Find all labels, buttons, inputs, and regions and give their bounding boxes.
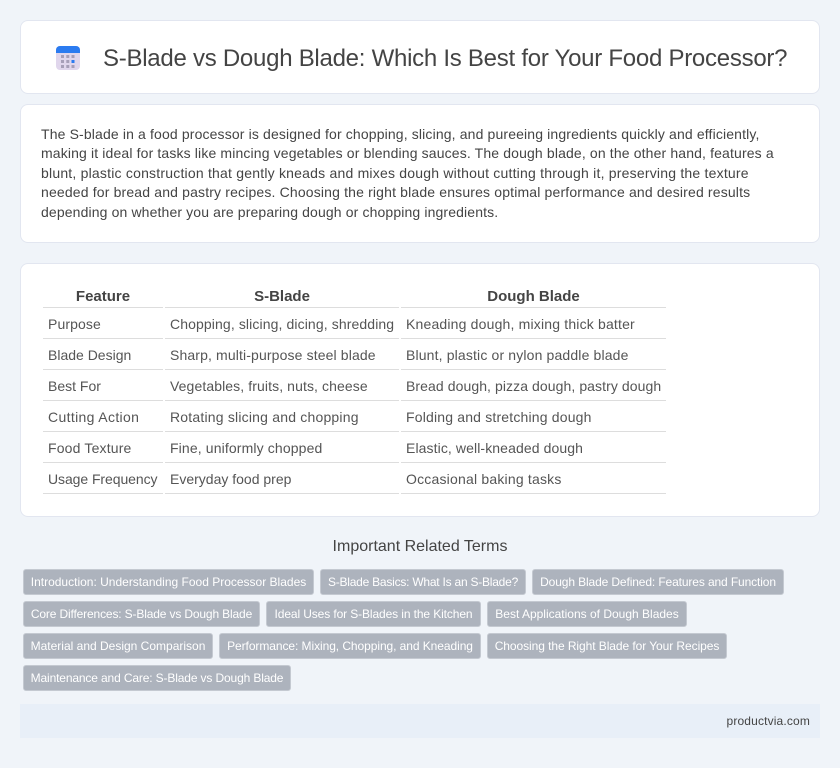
related terms tags: Best Applications of Dough Blades — [495, 607, 679, 621]
comparison table: Feature — [76, 288, 130, 305]
intro text: The S-blade in a food processor is designed for chopping, slicing, and pureeing ingredients quickly and efficiently, — [41, 126, 759, 142]
footer bar — [20, 704, 820, 738]
comparison table: Dough Blade — [487, 288, 580, 305]
comparison table: Everyday food prep — [170, 471, 291, 487]
intro text — [41, 126, 774, 220]
intro text: needed for bread and pastry recipes. Choosing the right blade ensures optimal performance and desired results — [41, 184, 750, 200]
comparison table: Occasional baking tasks — [406, 471, 562, 487]
footer source: productvia.com — [727, 714, 810, 728]
related terms tags: Maintenance and Care: S-Blade vs Dough Blade — [31, 671, 283, 685]
related terms tags: Choosing the Right Blade for Your Recipes — [495, 639, 719, 653]
comparison table: Bread dough, pizza dough, pastry dough — [406, 378, 661, 394]
table card — [20, 263, 820, 517]
comparison table: Fine, uniformly chopped — [170, 440, 322, 456]
related terms heading: Important Related Terms — [333, 538, 507, 555]
comparison table: Usage Frequency — [48, 471, 157, 487]
comparison table: Chopping, slicing, dicing, shredding — [170, 316, 394, 332]
comparison table: Blunt, plastic or nylon paddle blade — [406, 347, 629, 363]
comparison table: Sharp, multi-purpose steel blade — [170, 347, 376, 363]
related terms tags: Material and Design Comparison — [31, 639, 205, 653]
related terms tags — [23, 569, 784, 691]
comparison table: Rotating slicing and chopping — [170, 409, 359, 425]
title: S-Blade vs Dough Blade: Which Is Best for Your Food Processor? — [103, 45, 787, 72]
comparison table: S-Blade — [254, 288, 310, 305]
comparison table: Purpose — [48, 316, 101, 332]
related terms tags: Performance: Mixing, Chopping, and Kneading — [227, 639, 473, 653]
comparison table: Kneading dough, mixing thick batter — [406, 316, 635, 332]
comparison table: Vegetables, fruits, nuts, cheese — [170, 378, 368, 394]
title card — [20, 20, 820, 94]
comparison table: Blade Design — [48, 347, 131, 363]
related terms tags: Core Differences: S-Blade vs Dough Blade — [31, 607, 252, 621]
related terms tags: S-Blade Basics: What Is an S-Blade? — [328, 575, 518, 589]
intro text: making it ideal for tasks like mincing vegetables or blending sauces. The dough blade, on the other hand, features a — [41, 145, 774, 161]
comparison table: Best For — [48, 378, 101, 394]
comparison table: Cutting Action — [48, 409, 139, 425]
related terms tags: Dough Blade Defined: Features and Function — [540, 575, 776, 589]
comparison table: Elastic, well-kneaded dough — [406, 440, 583, 456]
comparison table: Food Texture — [48, 440, 132, 456]
comparison table: Folding and stretching dough — [406, 409, 592, 425]
comparison table — [43, 288, 666, 494]
related terms tags: Introduction: Understanding Food Processor Blades — [31, 575, 306, 589]
intro text: blunt, plastic construction that gently kneads and mixes dough without cutting through it, preserving the texture — [41, 165, 749, 181]
icon: calendar — [56, 46, 80, 70]
intro card — [20, 104, 820, 243]
intro text: depending on whether you are preparing dough or chopping ingredients. — [41, 204, 498, 220]
related terms tags: Ideal Uses for S-Blades in the Kitchen — [275, 607, 472, 621]
